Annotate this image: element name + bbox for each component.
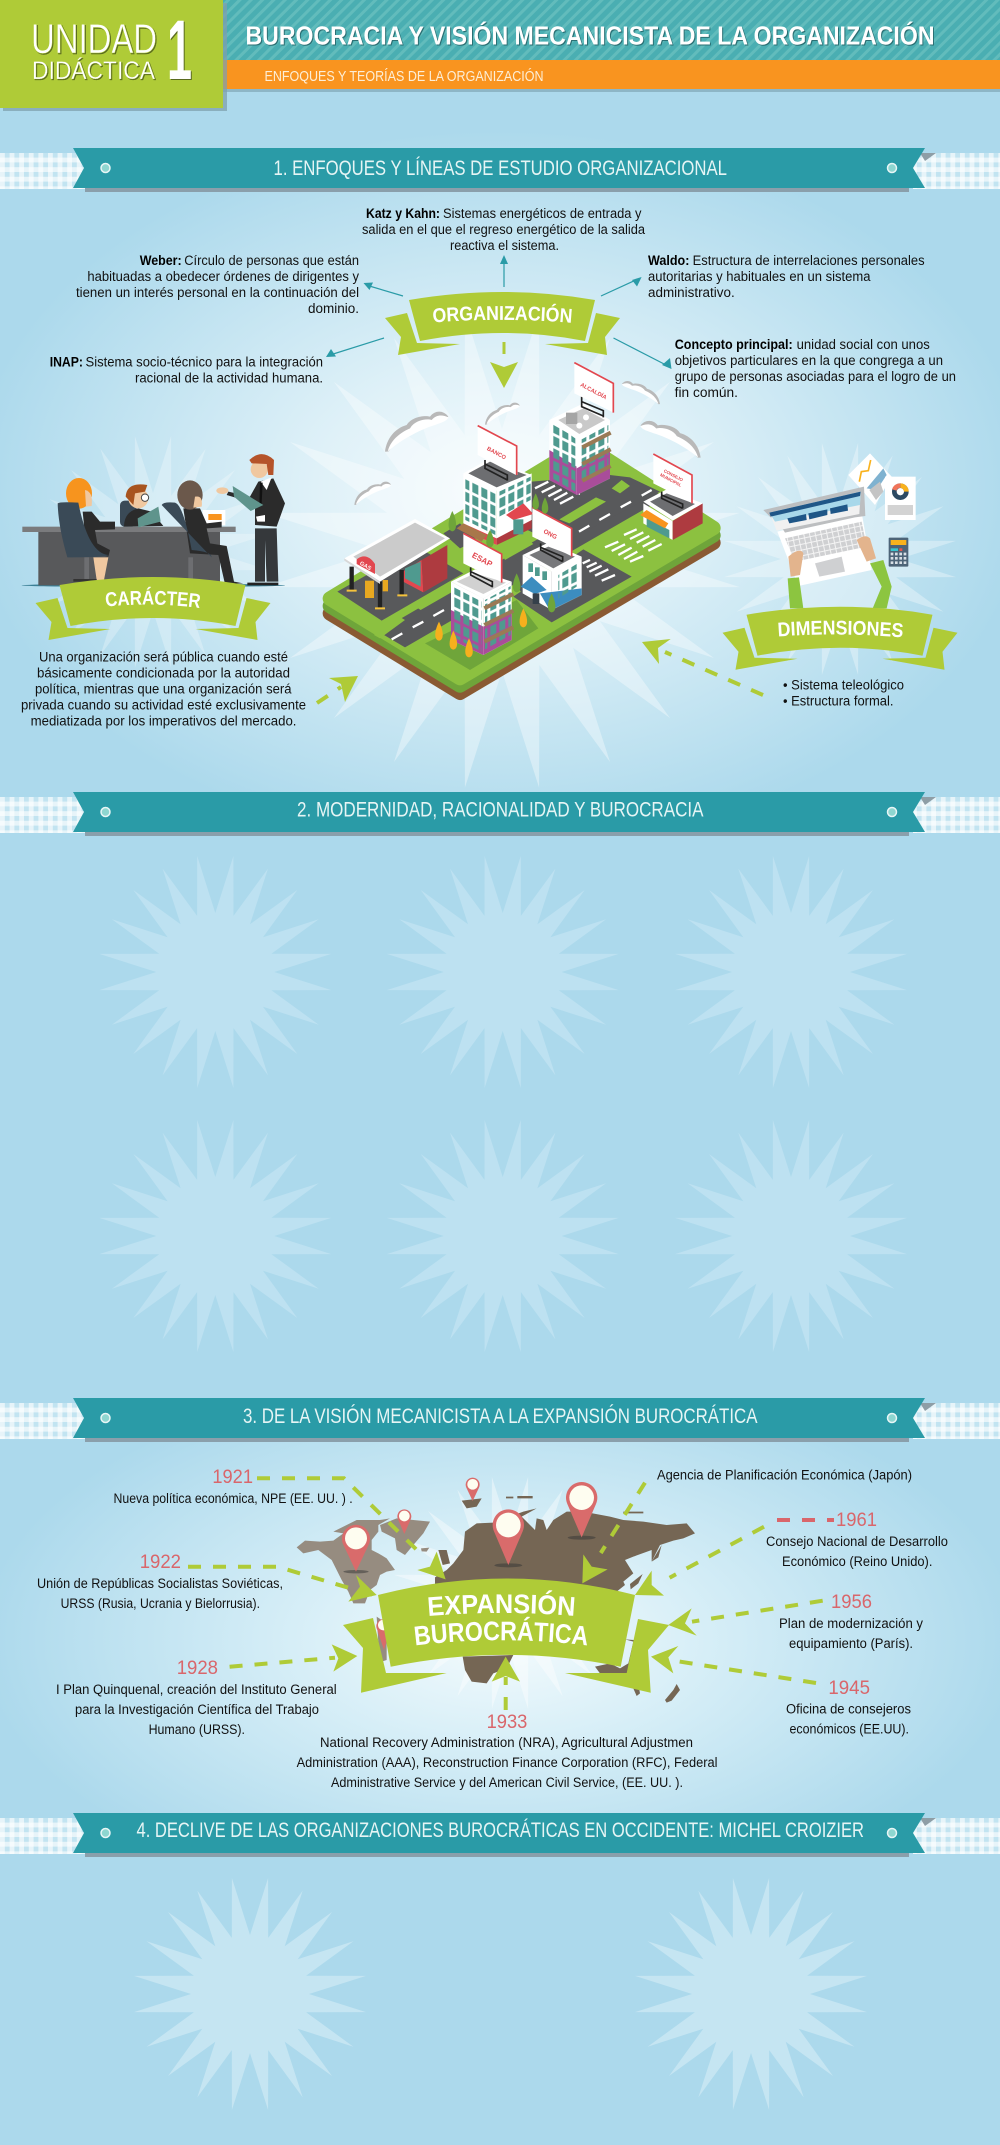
section 1 heading ribbon: [0, 148, 1000, 192]
section 2 heading ribbon: [0, 792, 1000, 836]
building: alcaldía: [549, 363, 613, 495]
timeline: 1961: 1961: [836, 1509, 877, 1531]
text: carácter description: básicamente condicionada por la autoridad: [37, 666, 290, 680]
building: consejo municipal: CONSEJO: [663, 468, 684, 483]
text: Katz y Kahn: Katz y Kahn:: [366, 206, 440, 221]
illustration: laptop with hands and documents: [763, 453, 916, 608]
banner: dimensiones: DIMENSIONES: [778, 620, 903, 638]
timeline: 1956: Plan de modernización y: [779, 1616, 923, 1631]
text: carácter description: privada cuando su actividad esté exclusivamente: [21, 698, 306, 712]
section 2 heading ribbon: 2. MODERNIDAD, RACIONALIDAD Y BUROCRACIA: [297, 798, 704, 822]
building: banco: [457, 426, 533, 545]
building: esap: [451, 533, 513, 655]
city ground plate: [330, 445, 713, 693]
text: Weber: tienen un interés personal en la continuación del: [76, 285, 359, 300]
timeline: 1956: equipamiento (París).: [789, 1636, 913, 1651]
section 3 heading ribbon: [0, 1398, 1000, 1442]
unit label: DIDÁCTICA: [32, 56, 155, 85]
seated woman: [58, 478, 115, 582]
trees: [435, 493, 555, 657]
text: INAP: Sistema socio-técnico para la integración: [86, 354, 323, 370]
text: Waldo: autoritarias y habituales en un sistema: [648, 269, 871, 284]
arms and hands: [788, 536, 892, 608]
section 4 empty panel with two starbursts: [134, 1878, 867, 2110]
donut document: [885, 477, 916, 520]
text: Concepto principal: objetivos particulares en la que congrega a un: [675, 353, 943, 368]
banner: carácter: [36, 577, 270, 640]
text: carácter description: mediatizada por los imperativos del mercado.: [31, 714, 296, 728]
text: Katz y Kahn: [362, 206, 645, 253]
unit label: 1: [167, 3, 192, 97]
timeline: 1956: [779, 1591, 923, 1651]
text: INAP: racional de la actividad humana.: [135, 370, 323, 386]
subtitle: ENFOQUES Y TEORÍAS DE LA ORGANIZACIÓN: [264, 68, 544, 85]
text: carácter description: [21, 650, 306, 728]
timeline: 1928: para la Investigación Científica del Trabajo: [75, 1702, 319, 1717]
timeline: 1945: [786, 1677, 911, 1736]
laptop: [763, 487, 872, 586]
building: alcaldía: ALCALDÍA: [579, 381, 608, 401]
timeline: 1933: National Recovery Administration (NRA), Agricultural Adjustmen: [320, 1735, 693, 1750]
timeline: Japón: Agencia de Planificación Económica (Japón): [657, 1468, 912, 1482]
text: Weber: dominio.: [308, 301, 359, 316]
timeline: 1933: 1933: [487, 1711, 527, 1733]
arrow: carácter to city: [317, 676, 358, 703]
text: Weber: habituadas a obedecer órdenes de dirigentes y: [87, 269, 359, 284]
teal arrows from organización banner: [326, 255, 672, 369]
world map: [297, 1478, 695, 1703]
text: dimensiones list: • Estructura formal.: [783, 694, 894, 708]
timeline: 1961: Consejo Nacional de Desarrollo: [766, 1534, 948, 1549]
seated man with brown hair: [162, 480, 243, 584]
timeline: 1928: Humano (URSS).: [149, 1722, 245, 1737]
section 3 heading ribbon: 3. DE LA VISIÓN MECANICISTA A LA EXPANSIÓN BUROCRÁTICA: [243, 1405, 758, 1428]
chart document: [848, 453, 892, 505]
text: dimensiones list: • Sistema teleológico: [783, 678, 904, 692]
text: Waldo: Estructura de interrelaciones personales: [693, 253, 925, 268]
timeline: 1922: Unión de Repúblicas Socialistas Soviéticas,: [37, 1576, 283, 1591]
building: consejo municipal: MUNICIPAL: [659, 472, 683, 488]
main title: BUROCRACIA Y VISIÓN MECANICISTA DE LA ORGANIZACIÓN: [246, 20, 934, 50]
clouds: [354, 381, 701, 505]
standing man: [216, 454, 285, 585]
timeline: 1921: Nueva política económica, NPE (EE. UU. ) .: [114, 1491, 353, 1506]
timeline: 1933: Administration (AAA), Reconstruction Finance Corporation (RFC), Federal: [297, 1755, 718, 1770]
text: Waldo: [648, 253, 925, 300]
unit label: UNIDAD: [31, 15, 157, 62]
timeline: 1928: I Plan Quinquenal, creación del Instituto General: [56, 1682, 337, 1697]
text: Katz y Kahn: salida en el que el regreso energético de la salida: [362, 222, 645, 237]
text: Weber: Weber:: [140, 253, 182, 268]
illustration: isometric city: [330, 363, 713, 693]
timeline: 1922: URSS (Rusia, Ucrania y Bielorrusia).: [61, 1596, 260, 1611]
timeline: 1956: 1956: [831, 1591, 872, 1613]
timeline: 1928: [56, 1657, 337, 1737]
timeline: 1928: 1928: [177, 1657, 218, 1679]
timeline: 1961: Económico (Reino Unido).: [782, 1554, 932, 1569]
text: Concepto principal: grupo de personas asociadas para el logro de un: [675, 369, 956, 384]
text: INAP: [50, 354, 323, 386]
city roads: [337, 475, 665, 670]
arrow: organización to city: [490, 342, 518, 388]
text: Concepto principal: Concepto principal:: [675, 337, 793, 352]
section 1 glow background: [0, 110, 1000, 800]
map pins: [342, 1478, 597, 1650]
banner: carácter: CARÁCTER: [106, 586, 200, 608]
building: esap: ESAP: [470, 551, 494, 569]
road markings: [392, 482, 662, 639]
illustration: people around a desk: [22, 454, 285, 587]
building: ong: [521, 507, 582, 611]
text: Weber: Círculo de personas que están: [184, 253, 359, 268]
timeline: 1945: económicos (EE.UU).: [790, 1722, 909, 1736]
text: dimensiones list: [783, 678, 904, 708]
text: Waldo: Waldo:: [648, 253, 689, 268]
timeline: 1933: [297, 1711, 718, 1790]
arrow: dimensiones to city: [642, 639, 763, 695]
timeline: 1933: Administrative Service y del American Civil Service, (EE. UU. ).: [331, 1775, 683, 1790]
text: INAP: INAP:: [50, 354, 83, 370]
timeline: 1961: [766, 1509, 948, 1569]
banner: expansión burocrática: BUROCRÁTICA: [414, 1616, 587, 1646]
timeline: 1921: [114, 1466, 353, 1506]
text: Concepto principal: [675, 337, 956, 400]
section 2 empty panel with six starbursts: [99, 856, 907, 1352]
section 1 heading ribbon: 1. ENFOQUES Y LÍNEAS DE ESTUDIO ORGANIZACIONAL: [274, 157, 727, 180]
timeline: 1921: 1921: [212, 1466, 253, 1488]
banner: organización: ORGANIZACIÓN: [433, 304, 572, 323]
header: [0, 0, 1000, 111]
building: ong: ONG: [542, 528, 558, 541]
text: Concepto principal: unidad social con unos: [797, 337, 930, 352]
banner: expansión burocrática: [343, 1578, 669, 1693]
text: Concepto principal: fin común.: [675, 385, 738, 400]
southern landmasses: [377, 1617, 680, 1703]
calculator: [889, 538, 908, 567]
timeline: 1945: Oficina de consejeros: [786, 1702, 911, 1716]
building: gas station: GAS: [358, 561, 372, 572]
timeline: 1922: [37, 1551, 283, 1611]
section 3 glow background: [0, 1400, 1000, 1820]
section 4 heading ribbon: [0, 1813, 1000, 1857]
text: carácter description: Una organización será pública cuando esté: [39, 650, 288, 664]
northern landmasses: [297, 1496, 695, 1603]
timeline connectors and arrowheads: [188, 1478, 834, 1710]
text: Katz y Kahn: reactiva el sistema.: [450, 238, 559, 253]
seated man with glasses: [120, 484, 163, 527]
building: gas station: [344, 519, 450, 608]
desk: [22, 527, 285, 587]
text: Waldo: administrativo.: [648, 285, 735, 300]
section 1 sunburst decorations: [37, 312, 956, 1709]
unit label: [31, 3, 192, 97]
text: carácter description: política, mientras que una organización será: [35, 682, 292, 696]
timeline: 1922: 1922: [140, 1551, 181, 1573]
timeline: 1945: 1945: [828, 1677, 870, 1699]
text: Katz y Kahn: Sistemas energéticos de entrada y: [443, 206, 642, 221]
text: Weber: [76, 253, 359, 316]
banner: dimensiones: [722, 606, 958, 670]
banner: expansión burocrática: EXPANSIÓN: [428, 1590, 574, 1616]
banner: organización: [385, 292, 620, 355]
building: banco: BANCO: [486, 446, 507, 462]
building: consejo municipal: [640, 454, 703, 540]
